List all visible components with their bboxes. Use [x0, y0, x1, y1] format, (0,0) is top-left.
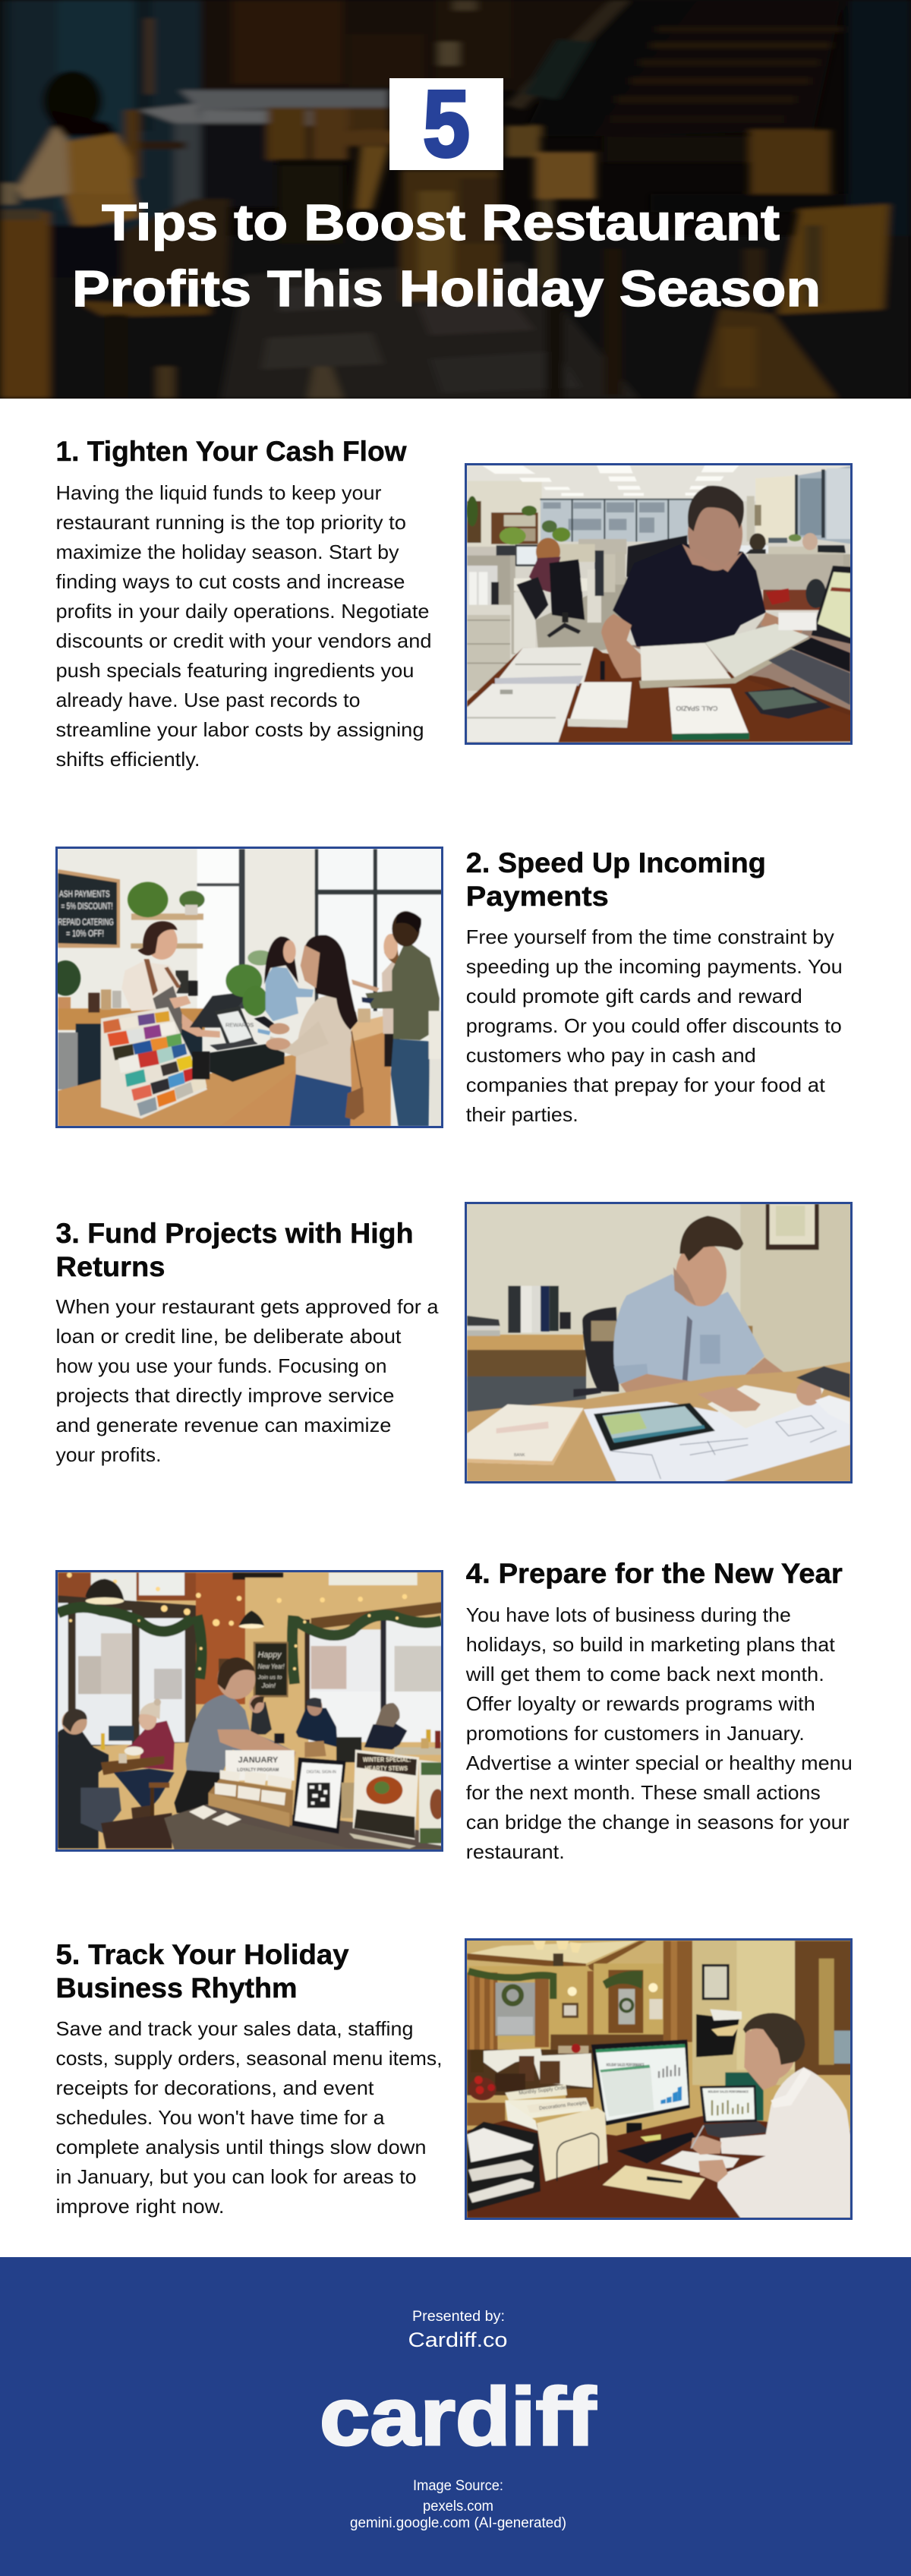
text block: tip 2: customers who pay in cash and	[466, 1044, 756, 1067]
text block: tip 3: and generate revenue can maximize	[56, 1414, 392, 1436]
photo: customers paying at cafe counter	[55, 847, 443, 1128]
image source credits: pexels.com	[423, 2499, 493, 2515]
photo: cafe with January loyalty program display: HEARTY STEWS	[364, 1765, 408, 1772]
text block: tip 2: could promote gift cards and reward	[466, 985, 802, 1007]
text block: tip 2: programs. Or you could offer discounts to	[466, 1014, 842, 1037]
text block: tip 5: receipts for decorations, and event	[56, 2076, 374, 2099]
photo: man tracking data at restaurant desk	[465, 1938, 853, 2220]
text block: tip 5: costs, supply orders, seasonal menu items,	[56, 2047, 442, 2070]
photo: man reviewing ledger in office: CALL SPAZIO	[676, 705, 717, 712]
text block: tip 3: loan or credit line, be deliberate about	[56, 1325, 402, 1348]
heading: tip 3	[56, 1218, 413, 1282]
text block: tip 2: companies that prepay for your food at	[466, 1074, 826, 1096]
photo: cafe with January loyalty program display: WINTER SPECIAL:	[363, 1757, 411, 1764]
text block: tip 1: finding ways to cut costs and increase	[56, 570, 405, 593]
photo: cafe with January loyalty program display: Join us to	[257, 1673, 282, 1680]
image source credits	[350, 2478, 566, 2531]
title: Tips to Boost Restaurant	[102, 194, 780, 251]
photo: cafe with January loyalty program display: Happy	[258, 1651, 282, 1660]
text block: tip 1: push specials featuring ingredients you	[56, 659, 415, 682]
hero banner	[0, 0, 911, 399]
panel: tip 5	[56, 1938, 853, 2220]
photo: man reviewing plans at desk	[465, 1202, 853, 1483]
photo: cafe with January loyalty program display: Join!	[261, 1682, 276, 1689]
text block: tip 4: holidays, so build in marketing plans that	[466, 1633, 836, 1656]
text block: tip 3: projects that directly improve service	[56, 1384, 395, 1407]
panel: tip 4	[55, 1558, 853, 1863]
heading: tip 3: 3. Fund Projects with High	[56, 1218, 413, 1249]
photo: man reviewing ledger in office	[465, 463, 853, 745]
text block: tip 1: shifts efficiently.	[56, 748, 200, 771]
text block: tip 5	[56, 2017, 442, 2218]
presented by credit	[408, 2309, 507, 2351]
heading: tip 4: 4. Prepare for the New Year	[466, 1558, 843, 1589]
presented by credit: Presented by:	[412, 2309, 505, 2325]
panel: tip 1	[56, 436, 853, 771]
heading: tip 2	[466, 847, 766, 912]
heading: tip 2: 2. Speed Up Incoming	[466, 847, 766, 878]
text block: tip 4: can bridge the change in seasons for your	[466, 1811, 850, 1833]
text block: tip 5: improve right now.	[56, 2195, 225, 2218]
number badge: 5	[423, 72, 470, 177]
photo: customers paying at cafe counter: REPAID CATERING	[58, 916, 114, 927]
heading: tip 1: 1. Tighten Your Cash Flow	[56, 436, 407, 467]
text block: tip 1: profits in your daily operations. Negotiate	[56, 600, 430, 623]
text block: tip 3: When your restaurant gets approved for a	[56, 1295, 439, 1318]
heading: tip 2: Payments	[466, 881, 609, 912]
text block: tip 5: complete analysis until things slow down	[56, 2136, 427, 2158]
panel: tip 3	[56, 1202, 853, 1483]
title: Profits This Holiday Season	[72, 260, 821, 317]
text block: tip 3	[56, 1295, 439, 1466]
text block: tip 4: restaurant.	[466, 1840, 565, 1863]
photo: cafe with January loyalty program display	[55, 1570, 443, 1852]
text block: tip 4: You have lots of business during the	[466, 1603, 791, 1626]
panel: tip 2	[50, 847, 843, 1128]
text block: tip 1: streamline your labor costs by assigning	[56, 718, 424, 741]
text block: tip 4: will get them to come back next month.	[465, 1663, 824, 1685]
text block: tip 4: for the next month. These small actions	[466, 1781, 821, 1804]
text block: tip 4	[465, 1603, 853, 1863]
text block: tip 4: Offer loyalty or rewards programs with	[466, 1692, 815, 1715]
image source credits: gemini.google.com (AI-generated)	[350, 2515, 566, 2531]
text block: tip 2: Free yourself from the time constraint by	[466, 925, 834, 948]
heading: tip 3: Returns	[56, 1251, 165, 1282]
photo: customers paying at cafe counter: ASH PAYMENTS	[59, 889, 110, 900]
text block: tip 5: schedules. You won't have time for a	[56, 2106, 385, 2129]
text block: tip 1: restaurant running is the top priority to	[56, 511, 406, 534]
number badge	[389, 72, 503, 177]
text block: tip 2	[466, 925, 843, 1126]
text block: tip 1: maximize the holiday season. Start by	[56, 541, 399, 563]
text block: tip 3: your profits.	[56, 1443, 161, 1466]
photo: customers paying at cafe counter: = 5% DISCOUNT!	[61, 901, 113, 912]
image source credits: Image Source:	[413, 2478, 503, 2494]
photo: cafe with January loyalty program display: DIGITAL SIGN-IN	[307, 1770, 336, 1774]
photo: man tracking data at restaurant desk: Monthly Supply Orders	[519, 2085, 571, 2096]
photo: man tracking data at restaurant desk: Decorations Receipts	[539, 2100, 588, 2111]
photo: customers paying at cafe counter: = 10% OFF!	[66, 929, 104, 939]
hero background photo: dim restaurant interior	[0, 0, 911, 399]
text block: tip 2: their parties.	[466, 1103, 578, 1126]
text block: tip 3: how you use your funds. Focusing on	[56, 1354, 387, 1377]
photo: cafe with January loyalty program display: New Year!	[258, 1663, 285, 1670]
photo: man tracking data at restaurant desk: HOLIDAY SALES PERFORMANCE	[607, 2063, 645, 2067]
text block: tip 5: Save and track your sales data, staffing	[56, 2017, 413, 2040]
photo: cafe with January loyalty program display: LOYALTY PROGRAM	[237, 1767, 279, 1773]
text block: tip 1	[56, 481, 431, 771]
heading: tip 5: Business Rhythm	[56, 1972, 298, 2004]
footer panel	[0, 2257, 911, 2576]
title	[72, 194, 821, 317]
text block: tip 1: already have. Use past records to	[56, 689, 360, 711]
text block: tip 4: promotions for customers in January.	[466, 1722, 805, 1745]
logo: cardiff wordmark: cardiff	[320, 2370, 597, 2462]
text block: tip 1: Having the liquid funds to keep your	[56, 481, 382, 504]
photo: customers paying at cafe counter: REWARDS	[225, 1021, 254, 1028]
heading: tip 5: 5. Track Your Holiday	[56, 1939, 349, 1970]
text block: tip 5: in January, but you can look for areas to	[56, 2165, 416, 2188]
heading: tip 5	[56, 1939, 349, 2004]
photo: cafe with January loyalty program display: JANUARY	[238, 1755, 278, 1764]
text block: tip 1: discounts or credit with your vendors and	[56, 629, 431, 652]
photo: man reviewing plans at desk: BANK	[514, 1453, 525, 1458]
text block: tip 2: speeding up the incoming payments. You	[466, 955, 843, 978]
photo: man tracking data at restaurant desk: HOLIDAY SALES PERFORMANCE	[708, 2089, 749, 2093]
presented by credit: Cardiff.co	[408, 2328, 507, 2351]
text block: tip 4: Advertise a winter special or healthy menu	[466, 1751, 853, 1774]
